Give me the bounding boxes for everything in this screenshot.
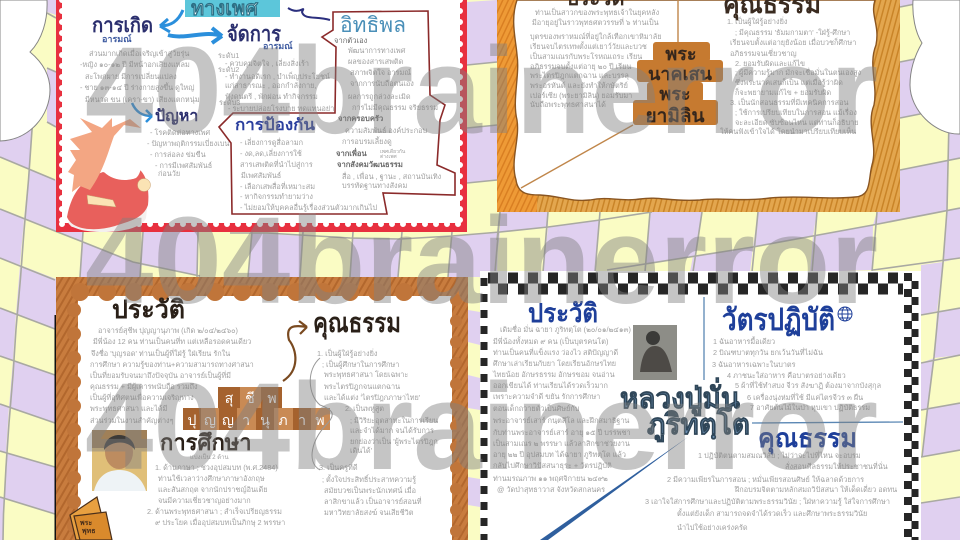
text: biography: ตอนเด็กถวายตัวเป็นศิษย์กับ	[493, 403, 580, 413]
text: virtues list: ; ตั้งใจประสิทธิ์ประสาทความรู้	[322, 474, 416, 484]
text: problems list: - การล่อลง ข่มขืน	[150, 150, 206, 159]
text: virtues list	[645, 450, 897, 532]
panel: Nagasena (wood border)	[497, 0, 900, 212]
text: practices list: 3 ฉันอาหารเฉพาะในบาตร	[712, 360, 796, 369]
title tiles: Phra Nagasena	[633, 42, 723, 127]
text: practices list: 6 เครื่องนุ่งห่มที่ใช้ มีแค่ไตรจีวร ๓ ผืน	[747, 392, 863, 402]
text: biography: อภิธรรมจบตั้งแต่อายุ ๒๐ ปี เรียน	[530, 61, 631, 71]
text: influence details	[334, 36, 442, 190]
text: prevention list: มีเพศสัมพันธ์	[241, 171, 281, 180]
text: biography: ท่านมรณภาพ ๑๑ พฤศจิกายน ๒๔๙๒	[493, 474, 608, 483]
heading: prevention: การป้องกัน	[235, 116, 315, 134]
text: biography: บุตรของพราหมณ์ที่อยู่ใกล้เทือกเขาหิมาลัย	[530, 31, 662, 41]
title puzzle: Sucheep Punyanubhab: ภ	[278, 412, 288, 428]
text: birth details: ส่วนมากเกิดเมื่อเจริญเข้าสู่วัยรุ่น	[89, 48, 189, 58]
arrow: squiggle to influence	[288, 8, 330, 20]
decorative cloud right	[910, 0, 960, 134]
text: influence details: การอบรมเลี้ยงดู	[342, 136, 392, 146]
text: practices list: 2 บิณฑบาตทุกวัน ยกเว้นวันที่ไม่ฉัน	[713, 347, 823, 357]
title puzzle: Sucheep Punyanubhab: ชี	[245, 390, 255, 406]
icon: book: พระ	[80, 520, 92, 527]
heading: problems: ปัญหา	[155, 107, 198, 126]
text: biography: พระอรหันต์ และยังทำให้กษัตริย์	[530, 81, 628, 90]
divider lines	[704, 297, 903, 423]
text: manage details: ระดับ2	[218, 65, 239, 74]
heading: manage: อารมณ์	[263, 40, 293, 51]
icon: globe	[838, 307, 852, 321]
text: biography: คุณธรรม + มีผู้เคารพนับถือ รวมถึง	[90, 382, 198, 391]
text: problems list: ก่อนวัย	[158, 169, 180, 178]
heading: biography: ประวัติ	[528, 298, 598, 328]
text: biography: กับท่านพระอาจารย์เสาร์ อายุ ๑๕ ปี บรรพชา	[493, 428, 631, 437]
text: education list	[147, 463, 285, 527]
text: virtues list: เดินได้'	[350, 446, 373, 455]
text: biography: ท่านเป็นคนที่แข็งแรง ว่องไว สติปัญญาดี	[493, 347, 618, 357]
text: influence details: ผลของสารเสพติด	[348, 57, 404, 66]
heading: virtues: คุณธรรม	[758, 423, 857, 455]
text: biography: อาจารย์สุชีพ ปุญญานุภาพ (เกิด ๒/๐๔/๒๔๖๐)	[98, 326, 238, 335]
text: birth details	[80, 48, 200, 104]
title puzzle: Sucheep Punyanubhab: ญ	[222, 412, 234, 428]
watermark: 404brainerror repeated	[85, 23, 878, 496]
arrow: to problems	[132, 103, 152, 122]
panel: Luang Pu Mun (checkered border)	[480, 271, 921, 540]
text: prevention list: - งด,ลด,เลี่ยงการใช้	[240, 148, 302, 158]
text: biography: เปอร์เซีย (พระยามิลิน) ยอมรับมา	[530, 91, 632, 100]
text: education list: และสันสกฤต จากนักปราชญ์อินเดีย	[158, 485, 268, 494]
text: influence details: สื่อ , เพื่อน , ฐานะ , สถานบันเทิง	[342, 171, 442, 181]
text: biography: เป็นสามเณร ๒ พรรษา แล้วลาสิกขาช่วยงาน	[493, 438, 630, 448]
text: biography	[530, 7, 662, 109]
text: influence details: สภาพจิตใจ อารมณ์	[350, 68, 411, 77]
text: virtues list: ลาสิกขาแล้ว เป็นอาจารย์สอนที่	[324, 496, 422, 506]
text: prevention list: - หากิจกรรมทำยามว่าง	[240, 192, 313, 201]
text: manage details: - ควบคุมจิตใจ , เลี่ยงสิ่งเร้า	[225, 58, 309, 68]
text: virtues list: มหาวิทยาลัยสงฆ์ จนเสียชีวิต	[324, 508, 414, 517]
text: biography: @ วัดป่าสุทธาวาส จังหวัดสกลนคร	[497, 485, 605, 494]
text: influence details: การไม่มีคุณธรรม จริยธรรม	[352, 103, 438, 112]
panel: sexual emotions (red border)	[56, 0, 467, 232]
text: influence details: จากเพื่อน	[336, 147, 367, 158]
heading: birth: อารมณ์	[102, 33, 132, 44]
text: education list: 2. ด้านพระพุทธศาสนา ; สำเร็จเปรียญธรรม	[147, 506, 282, 516]
text: virtues	[720, 16, 862, 136]
text: birth details: สะโพกผาย มีการเปลี่ยนแปลง	[85, 71, 177, 81]
text: virtues: ; มีคุณธรรม 'ธัมมกามตา' -ใฝ่รู้-ศึกษา	[735, 28, 850, 37]
text: biography: มีพี่น้อง 12 คน ท่านเป็นคนที่ท แต่เหลือรอดคนเดียว	[93, 336, 251, 346]
text: virtues list: ; มีวิริยะอุตสาหะในการเรียน	[350, 416, 438, 425]
text: biography: ศึกษาเล่าเรียนกับยา โดยเรียนอักษรไทย	[493, 359, 616, 368]
text: biography	[90, 326, 254, 425]
text: virtues: ; ผู้มีความรู้มาก มักจะเชื่อมั่นในตนเองสูง	[735, 67, 862, 77]
text: virtues list	[317, 348, 438, 517]
title: Luang Pu Mun	[620, 377, 750, 442]
title puzzle: Sucheep Punyanubhab: า	[242, 412, 250, 428]
title puzzle: Sucheep Punyanubhab: สุ	[225, 390, 234, 407]
title tiles: Phra Nagasena: พระ	[659, 84, 691, 104]
title: Luang Pu Mun: หลวงปู่มั่น	[620, 377, 740, 416]
text: virtues list: ตั้งแต่ยังเด็ก สามารถจดจำได้รวดเร็ว และศึกษาพระธรรมวินัย	[677, 508, 867, 518]
text: influence details: พัฒนาการทางเพศ	[348, 46, 406, 55]
text: influence details: บรรทัดฐานทางสังคม	[342, 181, 407, 190]
text: manage details: ระดับ3	[219, 98, 240, 107]
text: birth details: -หญิง ๑๐-๑๒ ปี มีหน้าอกเสียงแหลม	[80, 60, 190, 69]
text: biography: กลับไปศึกษาวิปัสสนาธุระ + วัตรปฏิบัติ	[493, 461, 612, 470]
heading: influence: อิทธิพล	[340, 14, 406, 37]
text: virtues: ; ใช้การเปรียบเทียบในการสอน แม้เรื่อง	[735, 107, 857, 117]
text: biography: ออกเขียนได้ ท่านเรียนได้รวดเร็วมาก	[493, 380, 608, 390]
text: virtues list: ฝึกอบรมจิตตามหลักสมถวิปัสสนา ให้เด็ดเดี่ยว อดทน	[733, 484, 897, 494]
text: virtues list: และจำได้มาก จนได้รับการ	[350, 426, 434, 435]
arrow: to birth	[160, 10, 183, 32]
decorative cloud left	[0, 0, 50, 141]
callout outline: influence and prevention	[219, 11, 455, 214]
title puzzle: Sucheep Punyanubhab: นุ	[260, 412, 270, 429]
icon: book	[70, 497, 112, 540]
text: virtues list: 3. เป็นครูที่ดี	[319, 462, 358, 472]
icon: book: พุทธ	[82, 528, 96, 535]
title puzzle: Sucheep Punyanubhab: ญ	[204, 412, 216, 428]
heading: biography: ประวัติ	[112, 296, 185, 324]
text: virtues: 3. เป็นนักสอนธรรมที่มีเทคนิคการสอน	[730, 97, 849, 107]
heading: education: การศึกษา	[160, 430, 252, 455]
title tiles: Phra Nagasena: พระ	[665, 44, 697, 64]
text: virtues: จะละเอียด ซับซ้อนไหน แต่ท่านก็อธิบาย	[735, 117, 859, 127]
text: biography: จึงชื่อ 'บุญรอด' ท่านเป็นผู้ที่ใฝ่รู้ ใฝ่เรียน รักใน	[90, 348, 230, 358]
text: biography: เป็นที่ยอมรับจนมาถึงปัจจุบัน อาจารย์เป็นผู้ที่มี	[90, 370, 231, 380]
title tiles: Phra Nagasena: ยามิลิน	[646, 106, 704, 127]
text: influence details: เพศเดียวกัน	[380, 148, 406, 155]
text: problems list	[147, 128, 229, 178]
text: virtues list: ; เป็นผู้ศึกษาในการศึกษา	[322, 359, 399, 369]
connector lines	[521, 0, 678, 188]
text: virtues list: 1 ปฏิบัติตนตามสมณวิสัย ; ไม่ว่าจะไปที่ไหน จะอบรม	[698, 450, 861, 460]
text: education subtitle: แบ่งเป็น 2 ด้าน	[190, 452, 229, 461]
text: practices list: 5 ผ้าที่ใช้ทำสบง จีวร สังฆาฏิ ต้องมาจากบังสุกุล	[735, 380, 881, 390]
text: manage details: ฟังดนตรี , พักผ่อน ทำกิจกรรม	[225, 92, 318, 101]
text: manage details: - ระบายปล่อยโรงบาย ทดแทนอย่างดี	[228, 104, 343, 113]
text: prevention list: สารเสพติดที่นำไปสู่การ	[240, 159, 313, 169]
text: biography: มีอายุอยู่ในราวพุทธศตวรรษที่ ๖ ท่านเป็น	[532, 17, 659, 27]
text: virtues list: สมัยบวชเป็นพระนักเทศน์ เมื่อ	[324, 485, 416, 495]
heading: virtues: คุณธรรม	[313, 308, 401, 340]
illustration: hugging girl	[67, 118, 150, 232]
text: biography: ไทยน้อย อักษรธรรม อักษรขอม จนอ่าน	[492, 370, 615, 379]
text: biography: พระอาจารย์เสาร์ กนฺตสีโล และฝึกสมาธิฐาน	[493, 416, 629, 425]
photo: portrait	[92, 430, 147, 491]
text: manage details: ระดับ1	[218, 51, 239, 60]
watermark: 404brainerror repeated: 404brainerror	[85, 359, 878, 496]
text: education list: ท่านใช้เวลาว่างศึกษาภาษาอังกฤษ	[158, 474, 265, 483]
text: biography: พระไตรปิฎกแตกฉาน และบรรลุ	[530, 71, 629, 80]
text: manage details: แก่สาธารณะ , ออกกำลังกาย,	[225, 81, 316, 90]
title puzzle: Sucheep Punyanubhab: ปุ	[188, 412, 197, 429]
text: biography: การศึกษา ความรู้ของท่าน+ความสามารถทางศาสนา	[90, 360, 254, 369]
brush stroke	[540, 437, 688, 540]
text: virtues: ซึ่งพระนาคเสนก็เป็น แต่เมื่อรู้ว่าผิด	[735, 77, 843, 87]
arrow: to manage	[168, 28, 222, 43]
text: virtues list: พระพุทธศาสนา โดยเฉพาะ	[324, 370, 408, 379]
text: biography	[492, 324, 631, 494]
heading: birth: การเกิด	[92, 15, 153, 37]
watermark: 404brainerror repeated: 404brainerror	[85, 193, 878, 330]
text: virtues list: พระไตรปิฎกจนแตกฉาน	[324, 382, 400, 391]
text: education list: ๙ ประโยค เมื่ออุปสมบทเป็นภิกษุ 2 พรรษา	[155, 517, 285, 527]
text: virtues: ให้คนฟังเข้าใจได้ โดยนำมาเปรียบเทียบเห็น	[720, 126, 856, 136]
text: prevention list: - เลี่ยงการดูสื่อลามก	[240, 137, 303, 147]
text: birth details: - ชาย ๑๓-๑๔ ปี ร่างกายสูงขึ้น ดูใหญ่	[80, 82, 194, 92]
text: prevention list	[240, 137, 378, 212]
text: education list: 1. ด้านภาษา ; ช่วงอุปสมบท (พ.ศ.2484)	[155, 463, 278, 472]
text: manage details: - ทำงานอดิเรก , บำเพ็ญประโยชน์	[225, 71, 330, 81]
text: influence details: ผลการถูกล่วงละเมิด	[348, 92, 411, 101]
text: manage details	[218, 51, 343, 113]
text: virtues list: นำไปใช้อย่างเคร่งครัด	[677, 523, 748, 532]
text: influence details: จากสังคมวัฒนธรรม	[337, 160, 403, 169]
text: virtues: เรียนจบตั้งแต่อายุยังน้อย เมื่อบวชก็ศึกษา	[730, 37, 856, 47]
text: virtues: อภิธรรมจนเชี่ยวชาญ	[730, 48, 797, 58]
text: problems list: - การมีเพศสัมพันธ์	[155, 161, 212, 170]
text: prevention list: - ไม่ยอมให้บุคคลอื่นรู้เรื่องส่วนตัวมากเกินไป	[240, 202, 378, 212]
text: biography: อายุ ๒๒ ปี อุปสมบท ได้ฉายา ภูริทตฺโต แล้ว	[493, 450, 626, 459]
text: virtues list: สั่งสอนศีลธรรมให้ประชาชนที่นั่น	[785, 461, 888, 471]
title tiles: Phra Nagasena: นาคเสน	[648, 64, 713, 84]
text: influence details: จากตัวเอง	[334, 36, 368, 45]
text: biography: เดิมชื่อ มั่น ฉายา ภูริทตฺโต (๒๐/๐๑/๒๔๑๓)	[500, 324, 631, 334]
text: virtues: 2. ยอมรับผิดและแก้ไข	[735, 59, 805, 68]
text: biography: ท่านเป็นสาวกของพระพุทธเจ้าในยุคหลัง	[535, 7, 660, 17]
watermark: 404brainerror repeated: 404brainerror	[85, 23, 878, 160]
text: virtues list: 3 เอาใจใส่การศึกษาและปฏิบัติตามพระธรรมวินัย ; ใฝ่หาความรู้ ใส่ใจการศึกษา	[645, 497, 890, 506]
text: birth details: มีหนวด ขน (เครา-ขา) เสียงแตกหนุ่ม	[85, 95, 200, 104]
text: biography: เรียนจบไตรเทพตั้งแต่เยาว์วัยและบวช	[530, 41, 647, 51]
text: virtues list: 2. เป็นพหูสูต	[345, 403, 384, 413]
arrow: curve to virtues	[283, 321, 307, 381]
text: virtues list: ยกย่องว่าเป็น 'ผู้พระไตรปิฎก	[350, 436, 438, 446]
title puzzle: Sucheep Punyanubhab: พ	[267, 390, 277, 406]
title puzzle: Sucheep Punyanubhab	[183, 387, 330, 430]
text: biography: ส่วนร่วมในงานสำคัญต่างๆ	[90, 416, 174, 425]
title: Luang Pu Mun: ภูริทตฺโต	[647, 406, 750, 442]
heading: manage: จัดการ	[227, 23, 282, 46]
title puzzle: Sucheep Punyanubhab: พ	[315, 412, 325, 428]
text: virtues: ก็จะพยายามแก้ไข + ยอมรับผิด	[735, 87, 831, 97]
text: biography: พระพุทธศาสนา และได้มี	[90, 404, 168, 413]
text: biography: เป็นผู้ที่อุทิศตนเพื่อความเจริญทาง	[90, 392, 194, 402]
text: virtues list: 1. เป็นผู้ใฝ่รู้อย่างยิ่ง	[317, 348, 378, 358]
text: influence details: จากครอบครัว	[338, 114, 383, 123]
text: virtues list: 2 มีความเพียรในการสอน ; หมั่นเพียรสอนศิษย์ ให้ฉลาดด้วยการ	[667, 474, 864, 484]
text: problems list: - โรคติดต่อทางเพศ	[150, 128, 211, 137]
text: influence details: ความสัมพันธ์ องค์ประกอบ	[345, 126, 428, 135]
text: prevention list: - เลือกเสพสื่อที่เหมาะสม	[240, 181, 315, 191]
text: virtues list: และได้แต่ง 'ไตรปิฎกภาษาไทย'	[324, 393, 421, 402]
text: biography: มีพี่น้องทั้งหมด ๙ คน (เป็นบุตรคนโต)	[493, 336, 608, 346]
heading: practices: วัตรปฏิบัติ	[722, 304, 835, 337]
text: biography: นับถือพระพุทธศาสนาได้	[530, 100, 606, 109]
text: biography: เพราะความจำดี ขยัน รักการศึกษา	[493, 392, 600, 401]
text: biography: เป็นสามเณรกับพระโรหณเถระ เรียน	[530, 51, 642, 61]
text: virtues: 1. เป็นผู้ใฝ่รู้อย่างยิ่ง	[727, 16, 788, 26]
text: influence details: จากการนับถือตนเอง	[350, 79, 414, 88]
text: education list: จนมีความเชี่ยวชาญอย่างมาก	[158, 495, 251, 505]
bracket: virtue grouping	[310, 358, 332, 470]
text: practices list	[712, 336, 881, 412]
title puzzle: Sucheep Punyanubhab: า	[298, 412, 306, 428]
text: practices list: 1 ฉันอาหารมื้อเดียว	[713, 336, 775, 346]
text: practices list: 7 อาศัยต้นไม้ในป่า หุบเขา ปฏิบัติธรรม	[750, 403, 870, 412]
text: influence details: ต่างเพศ	[380, 154, 398, 160]
photo: monk	[633, 325, 677, 380]
text: problems list: - ปัญหาพฤติกรรมเบี่ยงเบน	[147, 138, 229, 148]
text: practices list: 4 ภาชนะใส่อาหาร คือบาตรอย่างเดียว	[727, 371, 846, 380]
panel: Sucheep (brown border)	[54, 277, 468, 540]
